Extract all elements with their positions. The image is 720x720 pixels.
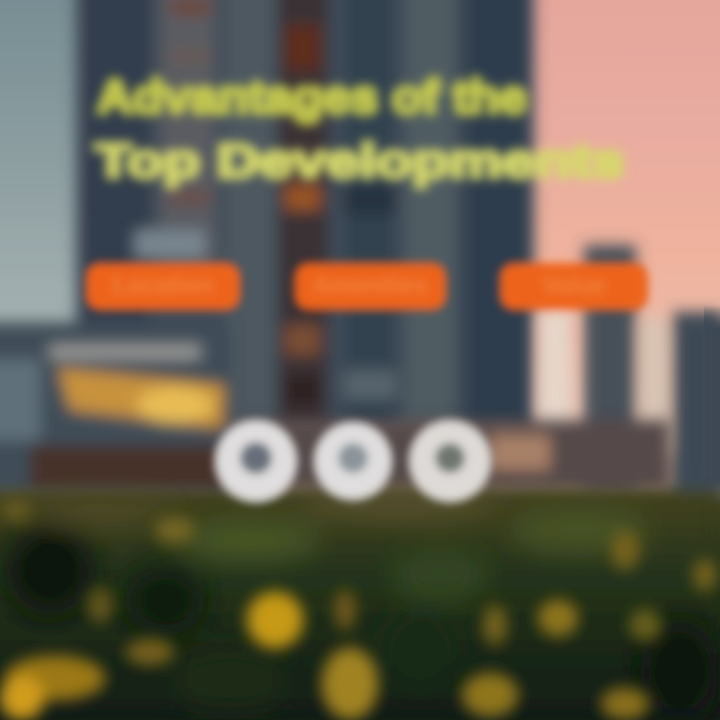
title line 2: Top Developments <box>95 134 625 187</box>
label pill 1: Location <box>113 272 213 299</box>
main tower <box>76 0 534 430</box>
icon circle 1 <box>215 420 297 502</box>
icon circles <box>215 420 491 502</box>
label pill 3: Value <box>543 272 605 299</box>
right edge building base <box>704 305 720 500</box>
icon circle 2 <box>314 422 392 500</box>
yellow flowers <box>0 498 717 720</box>
icon circle 3 <box>409 420 491 502</box>
foliage ground <box>0 492 720 720</box>
label pill 2: Amenities <box>313 272 427 299</box>
title <box>95 70 625 187</box>
orange labels <box>86 263 648 310</box>
label pill 3 <box>500 263 648 310</box>
title line 1: Advantages of the <box>97 70 527 123</box>
low left building <box>0 322 670 497</box>
left sky <box>0 0 85 335</box>
label pill 1 <box>86 263 240 310</box>
label pill 2 <box>295 263 446 310</box>
foliage shadows and highlights <box>5 493 720 720</box>
right towers <box>540 245 720 502</box>
